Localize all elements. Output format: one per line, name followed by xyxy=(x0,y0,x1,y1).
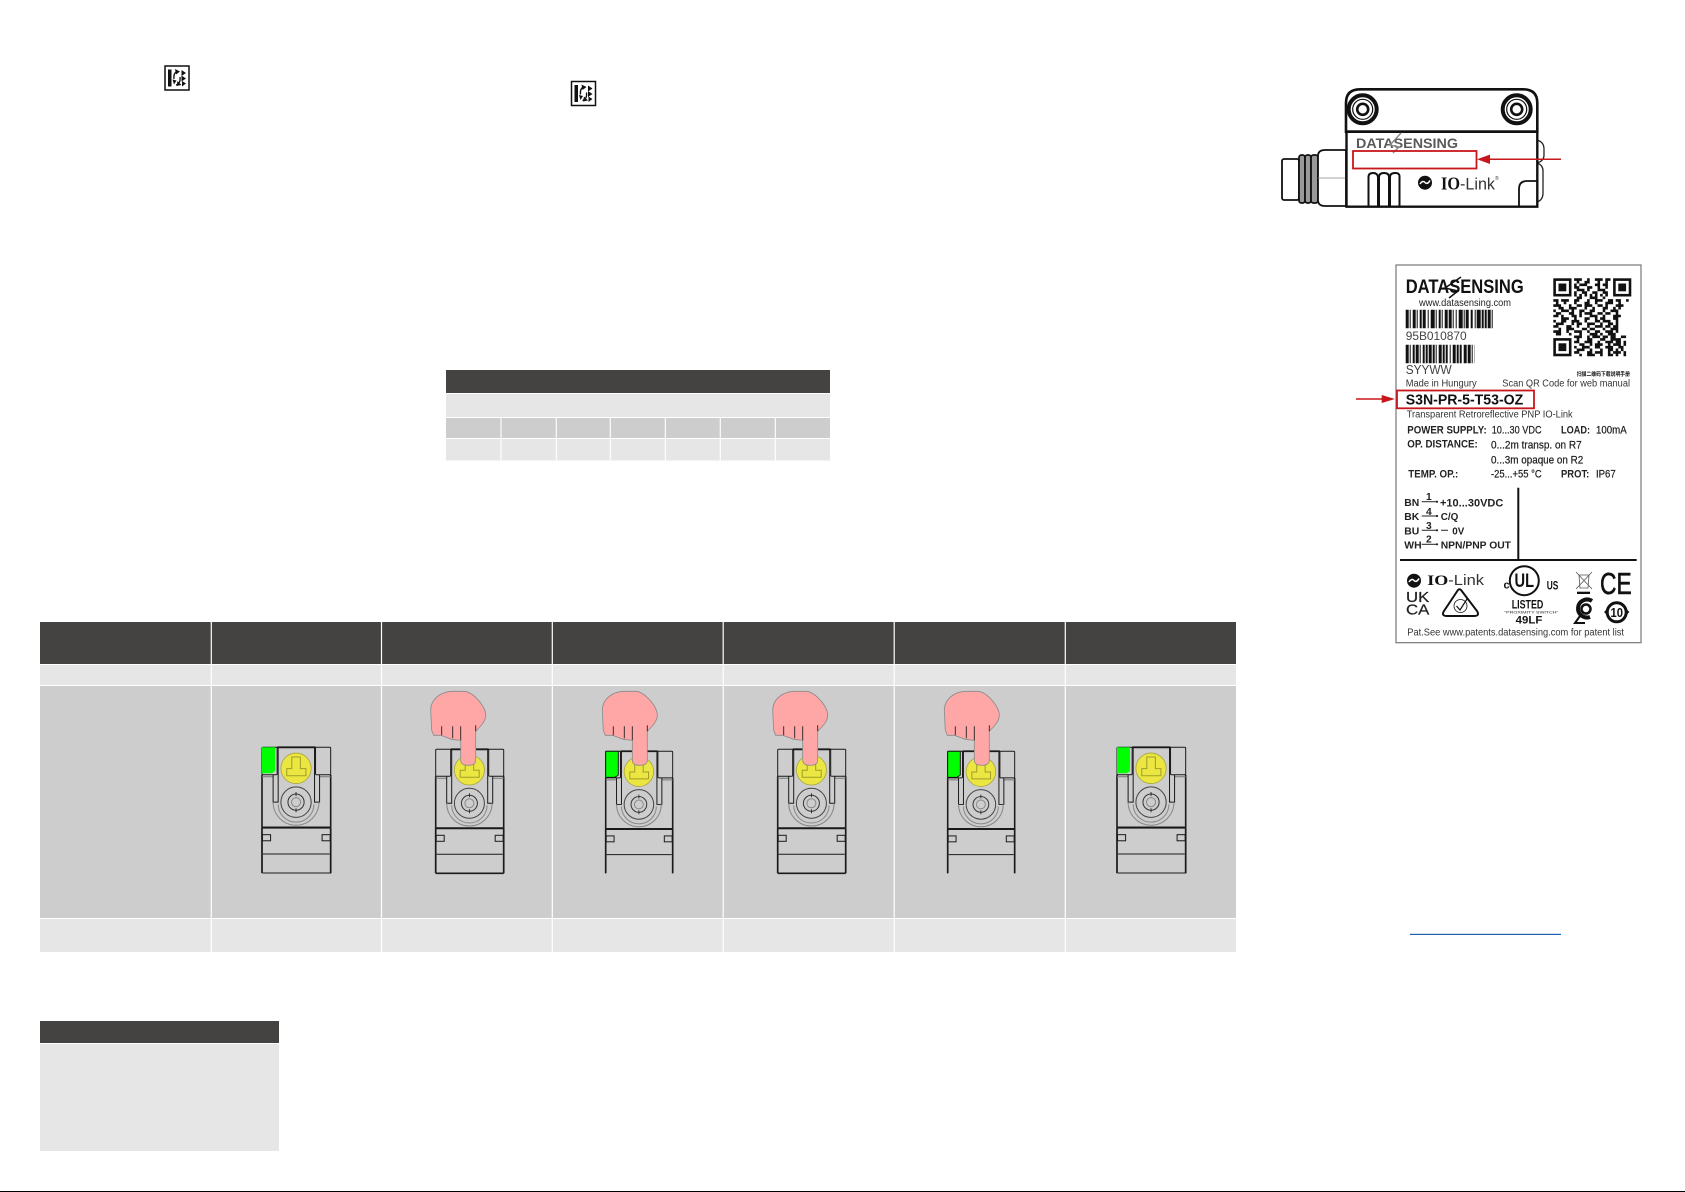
certification: ce: CE xyxy=(1600,566,1632,601)
model arrow xyxy=(1356,395,1395,403)
patent note: Pat.See www.patents.datasensing.com for patent list xyxy=(1407,628,1624,639)
wiring diagram: WH xyxy=(1404,539,1422,551)
small table xyxy=(446,370,830,460)
wiring diagram: NPN/PNP OUT xyxy=(1441,539,1512,551)
certification: recycling mark xyxy=(1575,600,1592,623)
barcode two xyxy=(1406,345,1475,363)
certification: ukca: UK xyxy=(1406,590,1430,606)
specifications: 100mA xyxy=(1596,424,1627,436)
certification: ukca xyxy=(1406,590,1430,618)
setup procedure table xyxy=(40,622,1236,952)
barcode one xyxy=(1406,310,1493,328)
label logo: DATASENSING xyxy=(1406,277,1524,298)
specifications: OP. DISTANCE: xyxy=(1407,439,1478,451)
step 5: finger pressing, green LED xyxy=(944,691,1015,873)
step 1: sensor with green LED xyxy=(262,747,331,873)
wiring diagram: 4 xyxy=(1426,506,1432,518)
sensor side view drawing xyxy=(1282,89,1561,207)
certification: rcm xyxy=(1443,589,1478,616)
logo: DATASENSING xyxy=(1356,135,1458,151)
specifications: POWER SUPPLY: xyxy=(1407,424,1487,436)
model code: S3N-PR-5-T53-OZ xyxy=(1406,392,1523,408)
icon: settings symbol left xyxy=(165,66,189,90)
certification: ul: 49LF xyxy=(1516,614,1543,626)
step 3: finger pressing, green LED xyxy=(602,691,673,873)
specifications: -25...+55 °C xyxy=(1491,468,1542,480)
qr note: Scan QR Code for web manual xyxy=(1502,379,1630,390)
certification: rohs 10: 10 xyxy=(1610,606,1623,620)
wiring diagram: BK xyxy=(1404,511,1420,523)
specifications: LOAD: xyxy=(1561,424,1590,436)
connector xyxy=(1282,150,1346,206)
certification: ul: UL xyxy=(1514,571,1534,592)
certification: ukca: CA xyxy=(1406,602,1430,618)
wiring diagram: C/Q xyxy=(1441,511,1458,523)
icon: settings symbol right xyxy=(572,82,596,106)
bottom left note table xyxy=(40,1021,279,1151)
page bottom rule xyxy=(0,1191,1685,1192)
specifications: 0...3m opaque on R2 xyxy=(1491,454,1583,466)
certification: ul: LISTED xyxy=(1512,597,1544,611)
red marker box xyxy=(1353,151,1476,168)
specifications: PROT: xyxy=(1561,468,1589,480)
mounting holes xyxy=(1349,95,1531,123)
certification: ul: c xyxy=(1504,579,1510,591)
sensor body xyxy=(1346,132,1537,207)
description: Transparent Retroreflective PNP IO-Link xyxy=(1407,410,1574,421)
specifications: 0...2m transp. on R7 xyxy=(1491,439,1582,451)
wiring diagram: +10...30VDC xyxy=(1440,498,1503,510)
certification: ul xyxy=(1504,566,1559,626)
red model box xyxy=(1397,390,1534,408)
wiring diagram: BU xyxy=(1404,525,1419,537)
vents xyxy=(1368,173,1400,207)
specifications: IP67 xyxy=(1596,468,1616,480)
certification: ul: "PROXIMITY SWITCH" xyxy=(1504,610,1559,614)
certification: rohs 10 xyxy=(1604,603,1629,622)
wiring diagram: 2 xyxy=(1426,534,1432,546)
link underline xyxy=(1410,934,1561,935)
chinese scan note: 扫描二维码下载说明手册 xyxy=(1577,370,1630,378)
certification: io-link: -Link xyxy=(1448,572,1485,589)
step 6: sensor with green LED xyxy=(1117,747,1186,873)
io-link logo xyxy=(1418,176,1432,190)
product label xyxy=(1356,265,1641,643)
certification: io-link: IO xyxy=(1427,573,1448,589)
side bumps xyxy=(1537,140,1544,202)
wiring diagram: BN xyxy=(1404,497,1419,509)
qr code xyxy=(1553,280,1630,355)
sensor side view drawing: -Link xyxy=(1460,174,1495,194)
made in hungary: Made in Hungury xyxy=(1406,379,1477,390)
red arrow xyxy=(1477,155,1561,164)
certification: ul: US xyxy=(1547,578,1558,592)
certification: weee xyxy=(1576,572,1592,594)
sensor side view drawing: IO xyxy=(1441,174,1460,194)
sensor side view drawing: ® xyxy=(1495,175,1499,182)
specifications xyxy=(1407,424,1627,480)
wiring diagram: 1 xyxy=(1426,491,1432,503)
wiring diagram: 3 xyxy=(1426,520,1432,532)
wiring diagram xyxy=(1404,491,1512,551)
barcode number: 95B010870 xyxy=(1406,329,1467,343)
lot code: SYYWW xyxy=(1406,362,1452,377)
certification: io-link xyxy=(1407,572,1485,589)
website: www.datasensing.com xyxy=(1418,298,1511,309)
wiring diagram: 0V xyxy=(1452,525,1464,537)
specifications: TEMP. OP.: xyxy=(1408,468,1458,480)
step 4: finger pressing button xyxy=(773,691,846,873)
step 2: finger pressing button xyxy=(431,691,504,873)
specifications: 10...30 VDC xyxy=(1492,424,1542,436)
